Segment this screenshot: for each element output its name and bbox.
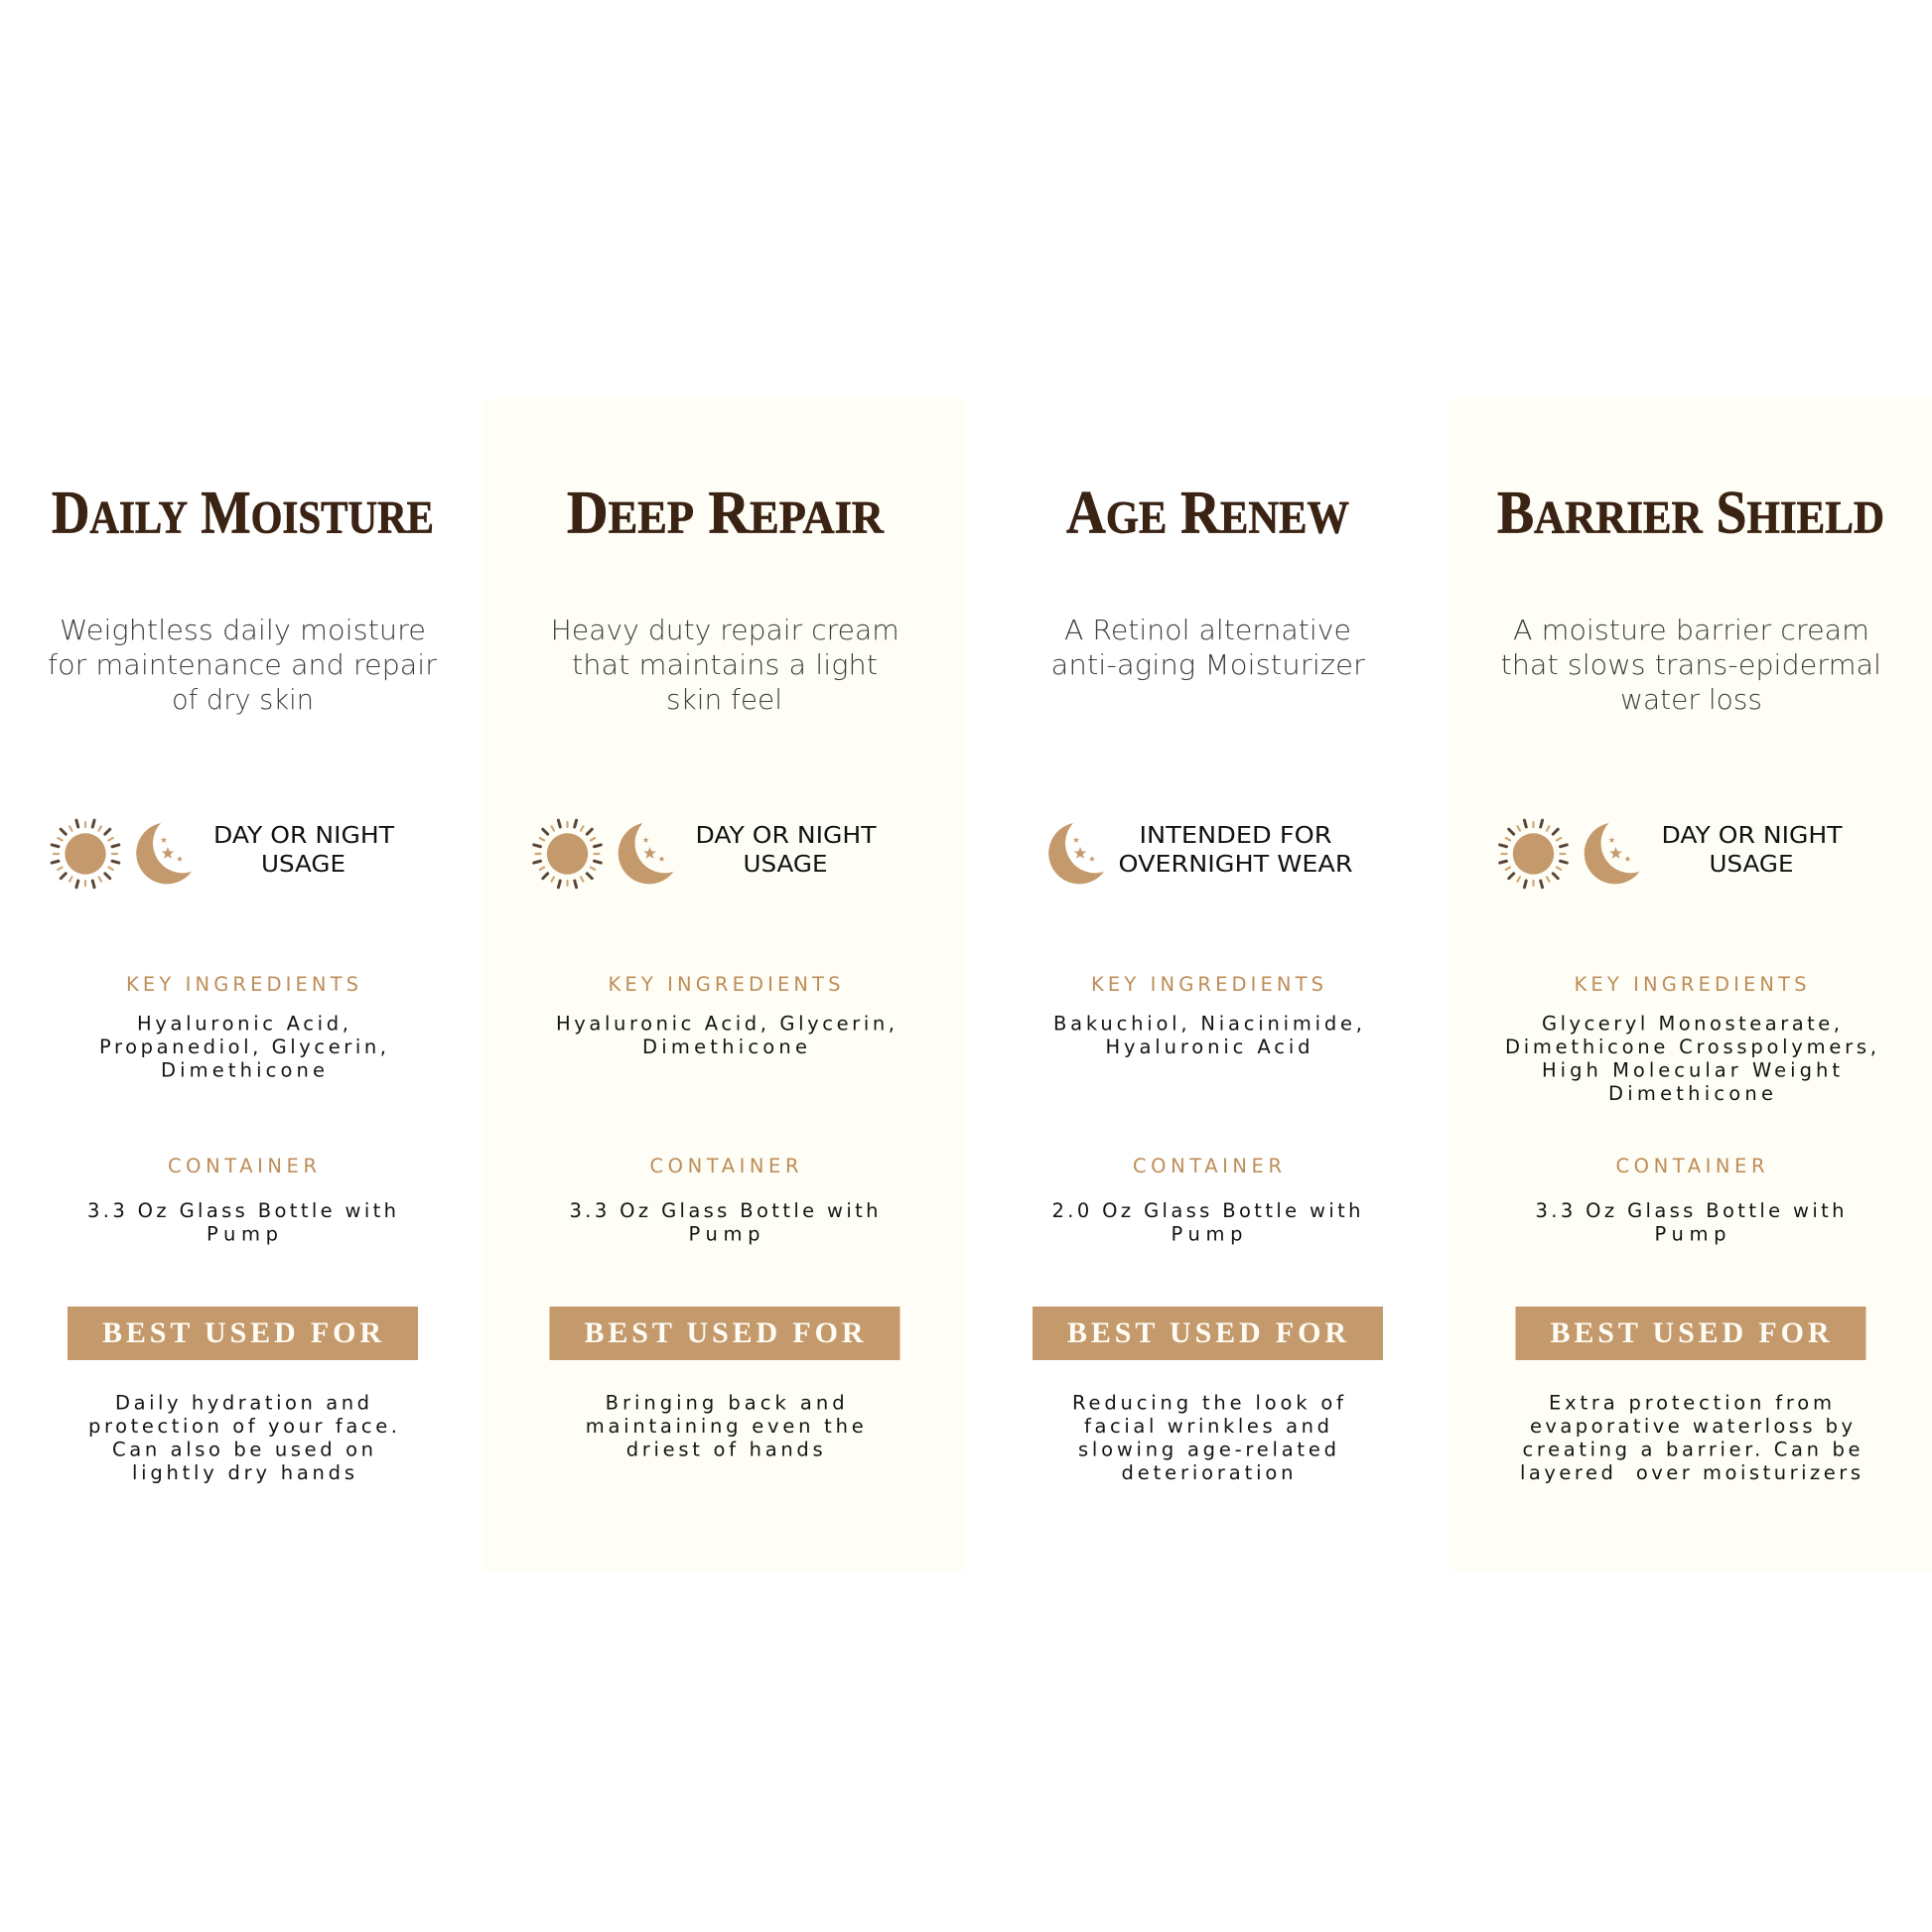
description: that slows trans-epidermal [1501, 648, 1881, 681]
best used for text: driest of hands [626, 1438, 823, 1461]
best used for text: layered over moisturizers [1520, 1461, 1861, 1484]
usage label: INTENDED FOR [1140, 821, 1332, 849]
panel background [1449, 398, 1932, 1571]
best used for text: Extra protection from [1549, 1392, 1832, 1414]
container text: 2.0 Oz Glass Bottle with [1052, 1199, 1360, 1222]
description [1501, 614, 1881, 716]
icon: moon and stars [1585, 823, 1640, 884]
usage label: DAY OR NIGHT [695, 821, 877, 849]
heading: container: CONTAINER [1133, 1155, 1282, 1177]
heading: container: CONTAINER [168, 1155, 317, 1177]
usage label: USAGE [1710, 850, 1793, 878]
usage label: OVERNIGHT WEAR [1118, 850, 1352, 878]
icon: sun [1500, 820, 1567, 888]
ingredients list: Propanediol, Glycerin, [99, 1035, 386, 1058]
ingredients list: Dimethicone [642, 1035, 807, 1058]
best used for text: lightly dry hands [132, 1461, 354, 1484]
description: A Retinol alternative [1064, 614, 1351, 646]
container text: 3.3 Oz Glass Bottle with [1535, 1199, 1845, 1222]
description: Heavy duty repair cream [551, 614, 899, 646]
ingredients list: Bakuchiol, Niacinimide, [1053, 1013, 1362, 1035]
container text [570, 1199, 878, 1245]
ingredients list: Hyaluronic Acid, Glycerin, [556, 1013, 895, 1035]
best used for text [586, 1392, 864, 1461]
description: water loss [1620, 683, 1762, 716]
container text: 3.3 Oz Glass Bottle with [87, 1199, 396, 1222]
usage label: USAGE [261, 850, 345, 878]
container text [1052, 1199, 1360, 1245]
ingredients list [99, 1013, 386, 1082]
description: skin feel [666, 683, 782, 716]
description: anti-aging Moisturizer [1050, 648, 1366, 681]
icon: sun [52, 820, 119, 888]
best used for text: facial wrinkles and [1084, 1415, 1329, 1438]
description: A moisture barrier cream [1513, 614, 1869, 646]
title: Daily Moisture [52, 475, 434, 548]
best used for text: evaporative waterloss by [1530, 1415, 1853, 1438]
ingredients list: High Molecular Weight [1542, 1058, 1840, 1082]
panel: Daily Moisture column [48, 475, 437, 1484]
title: Deep Repair [567, 475, 885, 548]
description [1050, 614, 1366, 681]
container text [87, 1199, 396, 1245]
ingredients list: Dimethicone [1608, 1082, 1773, 1105]
best used for text: protection of your face. [88, 1415, 397, 1438]
icon: moon and stars [1048, 823, 1104, 884]
usage label [1118, 821, 1352, 878]
icon: sun [534, 820, 601, 888]
description: of dry skin [172, 683, 314, 716]
heading: container: CONTAINER [1616, 1155, 1765, 1177]
heading: key ingredients: KEY INGREDIENTS [1091, 973, 1323, 996]
panel: Barrier Shield column [1449, 398, 1932, 1571]
banner: best used for [1515, 1307, 1866, 1360]
usage label: DAY OR NIGHT [213, 821, 395, 849]
banner: best used for [550, 1307, 899, 1360]
best used for text: slowing age-related [1078, 1438, 1336, 1461]
description: that maintains a light [572, 648, 878, 681]
best used for text: Can also be used on [112, 1438, 373, 1461]
ingredients list: Dimethicone Crosspolymers, [1505, 1035, 1876, 1058]
title: Age Renew [1066, 475, 1349, 548]
container text [1535, 1199, 1845, 1245]
banner: best used for [68, 1307, 418, 1360]
container text: Pump [689, 1223, 760, 1245]
best used for text: maintaining even the [586, 1415, 864, 1438]
ingredients list: Glyceryl Monostearate, [1542, 1013, 1840, 1035]
best used for text [1072, 1392, 1344, 1484]
heading: key ingredients: KEY INGREDIENTS [608, 973, 840, 996]
banner: best used for [1033, 1307, 1383, 1360]
usage label: USAGE [743, 850, 828, 878]
ingredients list [1505, 1013, 1876, 1105]
container text: 3.3 Oz Glass Bottle with [570, 1199, 878, 1222]
best used for text: creating a barrier. Can be [1523, 1438, 1861, 1461]
heading: container: CONTAINER [649, 1155, 798, 1177]
container text: Pump [207, 1223, 278, 1245]
heading: key ingredients: KEY INGREDIENTS [126, 973, 358, 996]
usage label: DAY OR NIGHT [1662, 821, 1843, 849]
icon: moon and stars [619, 823, 673, 884]
best used for text: deterioration [1122, 1461, 1293, 1484]
best used for text: Reducing the look of [1072, 1392, 1344, 1414]
panel: Age Renew column [1033, 475, 1383, 1484]
container text: Pump [1172, 1223, 1243, 1245]
banner: best used for: BEST USED FOR [584, 1316, 864, 1349]
description [48, 614, 437, 716]
description: for maintenance and repair [48, 648, 437, 681]
usage label [1662, 821, 1843, 878]
ingredients list [1053, 1013, 1362, 1058]
best used for text [88, 1392, 397, 1484]
banner: best used for: BEST USED FOR [102, 1316, 381, 1349]
heading: key ingredients: KEY INGREDIENTS [1575, 973, 1807, 996]
ingredients list [556, 1013, 895, 1058]
ingredients list: Dimethicone [161, 1058, 325, 1082]
best used for text [1520, 1392, 1861, 1484]
usage label [213, 821, 395, 878]
banner: best used for: BEST USED FOR [1067, 1316, 1346, 1349]
icon: moon and stars [136, 823, 192, 884]
usage label [695, 821, 877, 878]
best used for text: Bringing back and [606, 1392, 845, 1414]
ingredients list: Hyaluronic Acid [1106, 1035, 1311, 1058]
panel: Deep Repair column [483, 398, 966, 1571]
best used for text: Daily hydration and [115, 1392, 369, 1414]
title: Barrier Shield [1497, 475, 1884, 548]
panel background [483, 398, 966, 1571]
banner: best used for: BEST USED FOR [1551, 1316, 1830, 1349]
description [551, 614, 899, 716]
description: Weightless daily moisture [60, 614, 426, 646]
ingredients list: Hyaluronic Acid, [137, 1013, 348, 1035]
container text: Pump [1654, 1223, 1725, 1245]
